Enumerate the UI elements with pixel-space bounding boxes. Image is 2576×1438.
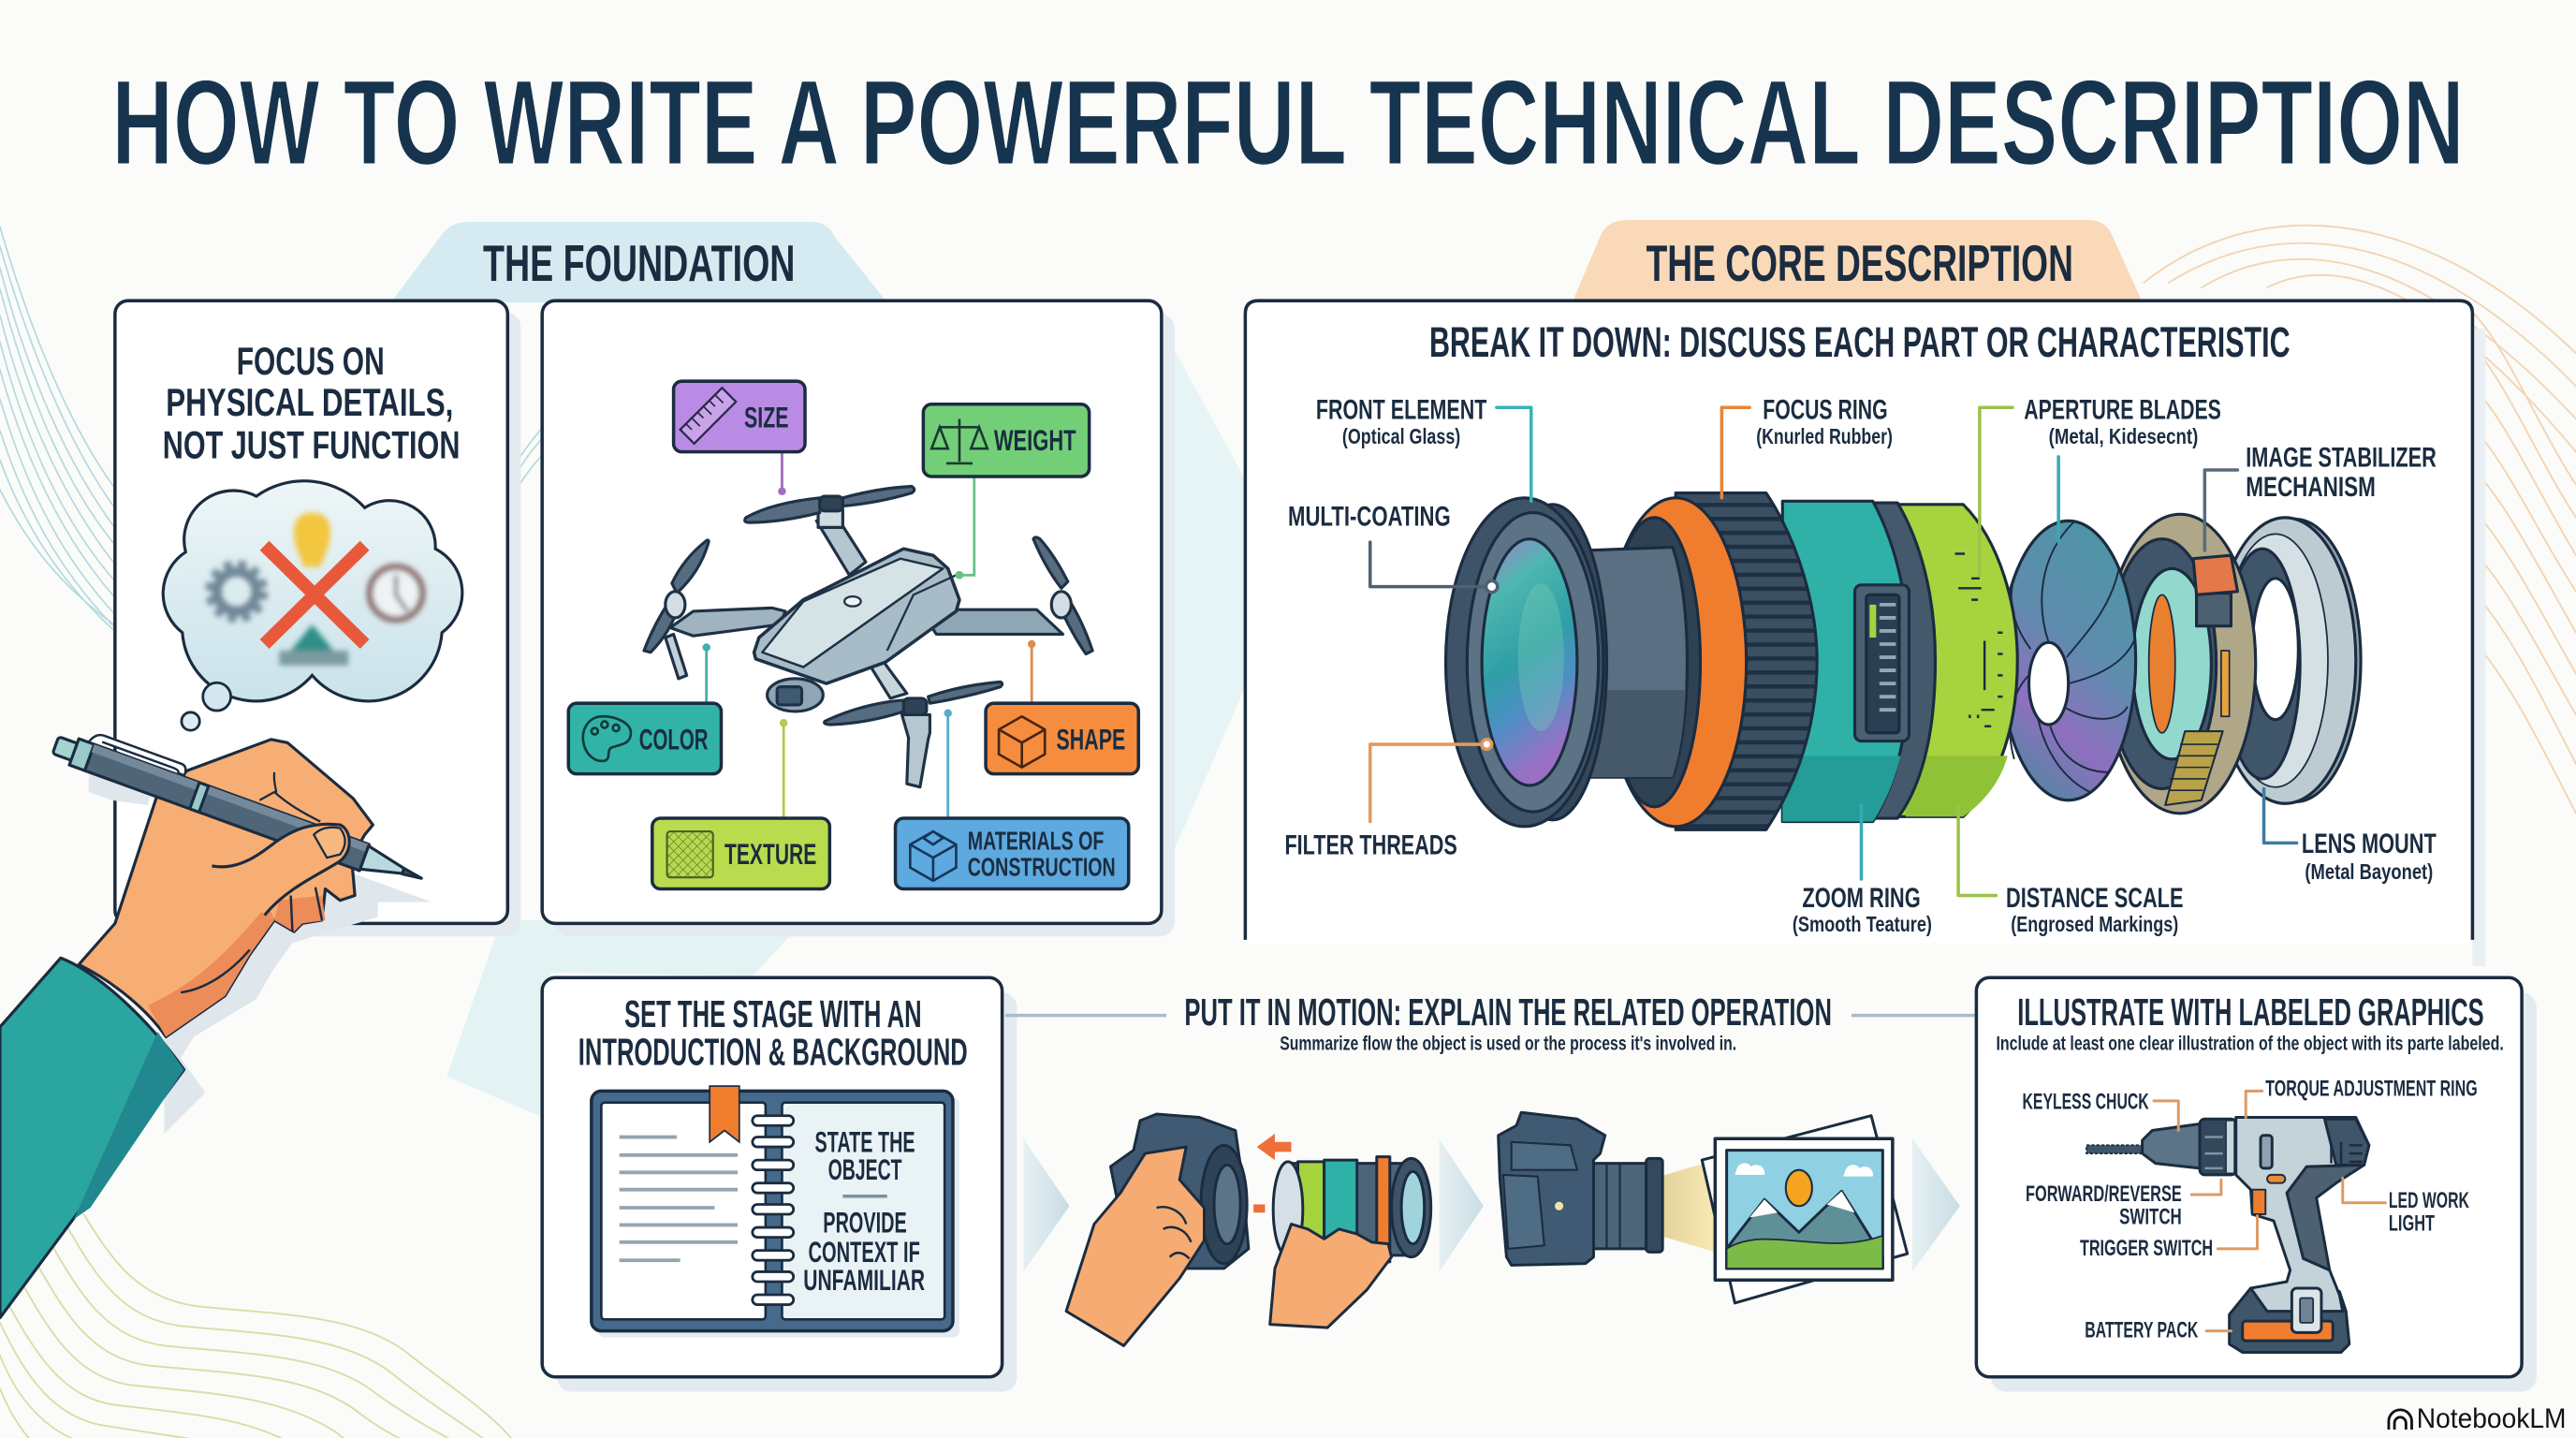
heading: put it in motion: Summarize flow the object is used or the process it's involved in. [1280,1034,1736,1055]
panel heading [578,992,968,1073]
exploded lens illustration [1445,493,2361,829]
panel: break it down with lens diagram [1245,301,2485,966]
notebook text: PROVIDE [823,1205,907,1239]
drill labels: TORQUE ADJUSTMENT RING [2265,1078,2478,1102]
section tab: the core description [1573,220,2143,302]
focus ring knurled barrel [1676,493,1817,829]
camera [1499,1112,1662,1265]
lens part labels: (Optical Glass) [1342,424,1460,448]
heading: put it in motion [1005,990,1976,1055]
drill labels: LED WORK [2389,1189,2469,1213]
lens part labels: DISTANCE SCALE [2006,883,2184,914]
hand shadow [89,772,432,1134]
NotebookLM logo: NotebookLM [2417,1403,2566,1434]
hand writing with pen [0,721,432,1318]
section tab: the foundation [391,222,887,302]
tag: texture [652,719,829,889]
drill illustration [2086,1117,2369,1352]
fuselage [754,549,959,683]
section tab: the foundation: THE FOUNDATION [483,235,795,292]
drill body [2236,1117,2369,1312]
drill labels: FORWARD/REVERSE [2026,1182,2182,1207]
lens part labels: MULTI-COATING [1288,502,1451,533]
right hand holding lens [1270,1225,1392,1328]
text lines [620,1137,738,1260]
drill labels: SWITCH [2119,1206,2182,1230]
panel heading: SET THE STAGE WITH AN [624,992,922,1035]
panel: physical attributes on drone [542,301,1175,936]
camera projecting onto photo [1499,1112,1908,1303]
grip and battery [2230,1288,2349,1352]
section tab: the core description: THE CORE DESCRIPTION [1647,235,2073,292]
drill leader lines [2154,1091,2385,1331]
lens callout leader lines [1370,407,2297,896]
panel heading: INTRODUCTION & BACKGROUND [578,1030,968,1073]
lens part labels: LENS MOUNT [2302,829,2437,859]
tag: texture: TEXTURE [724,837,816,871]
heading: put it in motion: PUT IT IN MOTION: EXPLAIN THE RELATED OPERATION [1184,990,1832,1034]
panel heading: FOCUS ON [237,339,385,383]
drill labels: TRIGGER SWITCH [2080,1237,2213,1261]
lens part labels: (Knurled Rubber) [1756,424,1893,448]
icon: material block [910,831,956,881]
orange motion arrow [1253,1134,1292,1212]
aperture blades [2001,521,2136,800]
tag: weight: WEIGHT [994,423,1076,457]
icon: ruler [681,388,736,444]
spiral binding [753,1116,794,1305]
lens part labels: ZOOM RING [1802,883,1921,914]
hands attaching lens to camera [1066,1114,1431,1345]
lens part labels: FILTER THREADS [1284,830,1457,861]
notebook text: OBJECT [828,1152,902,1186]
panel: illustrate with labeled graphics [1976,977,2537,1392]
drill labels [2023,1078,2478,1343]
lens part labels: IMAGE STABILIZER [2246,442,2437,473]
lens part labels: APERTURE BLADES [2024,395,2221,426]
thought cloud with crossed-out function icons [163,481,462,730]
lens part labels: MECHANISM [2246,472,2376,503]
hand [79,740,373,1036]
photo stack [1702,1116,1908,1303]
tag: color [568,643,721,774]
tag: materials of construction: MATERIALS OF [968,826,1104,855]
drill labels: LIGHT [2389,1212,2435,1237]
notebook illustration [592,1086,959,1338]
bookmark [710,1086,739,1142]
sleeve [0,958,184,1318]
lens part labels: (Metal Bayonet) [2305,859,2433,884]
drill labels: KEYLESS CHUCK [2023,1091,2149,1115]
battery band [2243,1321,2333,1341]
propeller blades [745,498,820,522]
tag: weight [923,404,1090,580]
front element [1445,498,1606,827]
lens part labels [1284,395,2437,936]
drill bit [2086,1145,2143,1153]
thumb over pen [212,824,349,916]
panel: set the stage [542,977,1017,1392]
tag: shape [986,640,1138,774]
arrow: step one [1023,1138,1070,1271]
icon: mesh swatch [667,831,713,877]
gimbal camera [768,679,823,712]
tag: materials of construction: CONSTRUCTION [968,852,1116,881]
lens part labels: (Engrosed Markings) [2011,912,2178,936]
icon: palette [583,716,631,761]
tag: shape: SHAPE [1057,722,1125,756]
notebook text [803,1124,925,1297]
light cone [1560,1160,1715,1252]
notebook text: UNFAMILIAR [803,1263,925,1297]
panel heading: PHYSICAL DETAILS, [166,380,453,424]
orange rim and inner tube [1586,498,1747,827]
notebook text: STATE THE [815,1124,915,1158]
lens mount [2215,518,2361,803]
trigger [2252,1190,2265,1214]
panel heading [163,339,460,467]
lens part labels: (Smooth Teature) [1793,912,1932,936]
panel heading: NOT JUST FUNCTION [163,423,460,467]
drill labels: BATTERY PACK [2085,1319,2198,1343]
tag: size: SIZE [744,400,788,433]
distance scale barrel [1889,505,2017,816]
icon: balance scale [931,419,988,463]
camera body [1110,1114,1249,1269]
tag: materials of construction [896,710,1129,889]
left hand [1066,1147,1204,1345]
lens part labels: (Metal, Kidesecnt) [2049,424,2198,448]
arrow: step three [1912,1138,1960,1271]
icon: cube [999,716,1045,768]
image stabilizer mechanism [2104,514,2256,814]
lens part labels: FRONT ELEMENT [1316,395,1486,426]
notebook text: CONTEXT IF [809,1235,920,1269]
tag: color: COLOR [639,722,709,756]
arrow: step two [1439,1138,1484,1271]
zoom ring barrel [1782,501,1936,822]
chuck [2143,1123,2200,1168]
tag: size [674,381,805,495]
detached lens [1273,1157,1431,1262]
drone illustration [644,487,1092,787]
pen [51,721,431,891]
lens part labels: FOCUS RING [1763,395,1888,426]
panel: focus on physical details [115,301,520,936]
